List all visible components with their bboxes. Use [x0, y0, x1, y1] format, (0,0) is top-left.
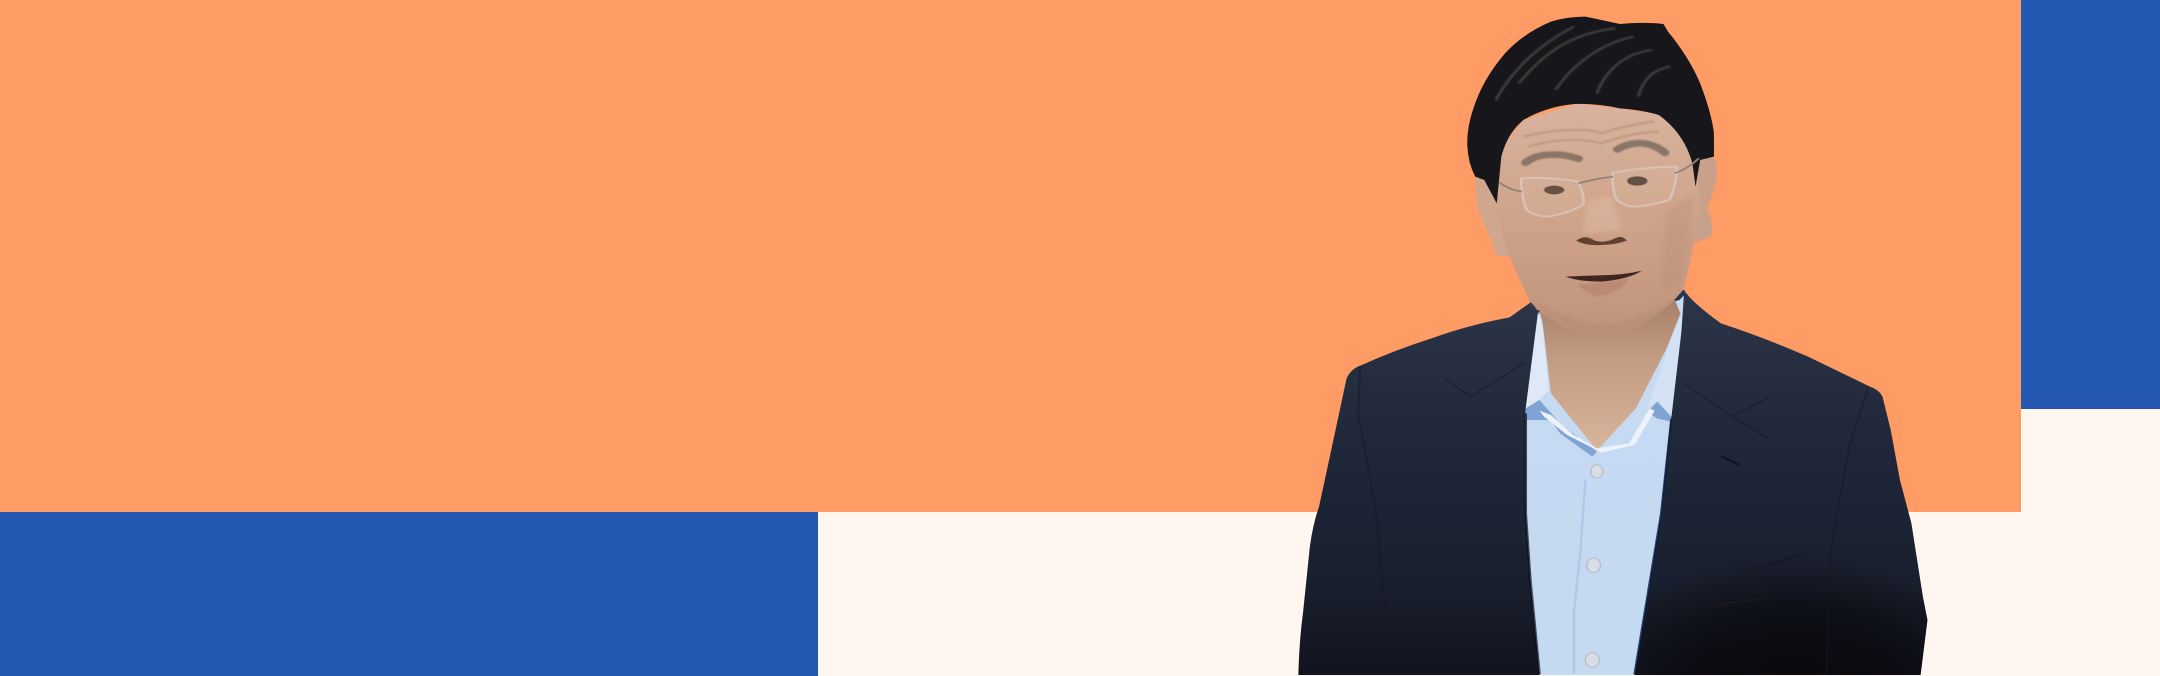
lapel buttonhole	[1721, 456, 1739, 465]
collar shadow	[1525, 400, 1597, 457]
head	[1467, 17, 1717, 335]
left ear	[1475, 177, 1514, 256]
jaw shading	[1530, 297, 1675, 335]
glasses arms	[1499, 158, 1699, 192]
placket line	[1574, 480, 1585, 673]
right ear	[1693, 157, 1717, 242]
sleeve seams	[1358, 367, 1868, 674]
shirt	[1526, 293, 1686, 675]
eyebrows	[1526, 143, 1665, 163]
eyes	[1544, 176, 1647, 194]
neck	[1537, 300, 1680, 451]
mouth	[1566, 271, 1642, 282]
cheek shading	[1661, 193, 1693, 293]
jacket silhouette	[1298, 290, 1927, 675]
panel: orange block	[0, 0, 2021, 512]
nose	[1583, 197, 1622, 233]
hair	[1467, 17, 1714, 203]
face	[1496, 103, 1700, 335]
forehead wrinkles	[1523, 122, 1659, 147]
lapel edge shadows	[1444, 363, 1770, 438]
shirt collar band pale	[1526, 312, 1549, 408]
left lapel	[1444, 303, 1537, 397]
torso: jacket and shirt	[1298, 290, 1927, 675]
nostrils	[1576, 237, 1627, 245]
portrait: man in dark suit	[1298, 16, 1928, 675]
panel: blue block bottom left	[0, 512, 818, 676]
jacket pocket	[1714, 598, 1767, 605]
glasses	[1521, 167, 1677, 217]
right lapel	[1680, 292, 1770, 417]
hair highlights	[1496, 27, 1670, 100]
shirt buttons	[1585, 465, 1603, 667]
panel: blue block top right	[2021, 0, 2160, 409]
jacket soft shadow lower right	[1655, 576, 1928, 675]
